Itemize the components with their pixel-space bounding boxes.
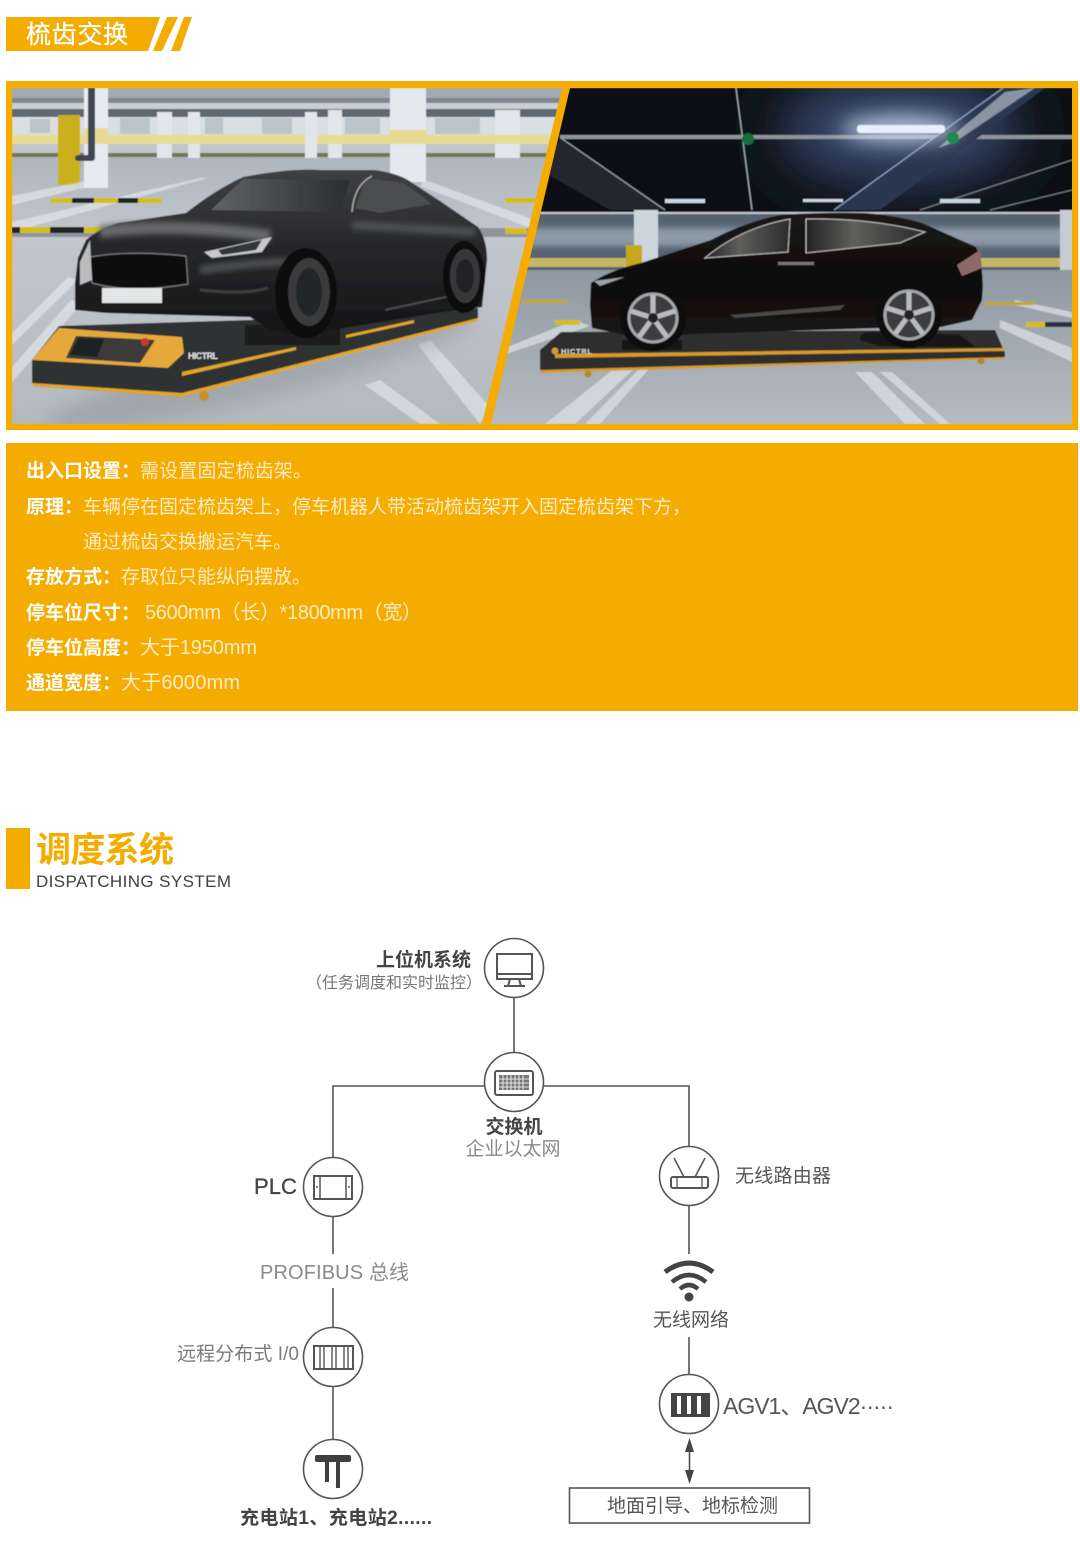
spec: 原理: 原理： (26, 497, 83, 518)
spec: 通道宽度: 通道宽度： (26, 671, 121, 694)
black SUV (590, 213, 983, 351)
heading: 调度系统 DISPATCHING SYSTEM: DISPATCHING SYSTEM (36, 872, 231, 891)
spec: 停车位尺寸: 停车位尺寸： (26, 601, 140, 624)
AGV robot platform (32, 307, 479, 424)
node: 充电站: 充电站1、充电站2...... (240, 1506, 432, 1529)
black coupe (75, 170, 487, 338)
heading banner: 梳齿交换: 梳齿交换 (26, 21, 128, 49)
spec: 出入口设置: 需设置固定梳齿架。 (140, 460, 312, 482)
node: 上位机系统 (306, 938, 544, 998)
box: 地面引导、地标检测 (570, 1488, 810, 1523)
spec: 停车位高度: 大于1950mm (140, 636, 257, 659)
node: PLC (254, 1158, 362, 1216)
spec: 原理: 车辆停在固定梳齿架上，停车机器人带活动梳齿架开入固定梳齿架下方， (83, 496, 691, 518)
icon: wifi 无线网络 (653, 1263, 729, 1331)
node: 上位机系统: 上位机系统 (376, 948, 471, 971)
spec: 出入口设置: 出入口设置： (26, 460, 140, 482)
spec: 原理 (26, 496, 691, 553)
heading banner: 梳齿交换 (6, 17, 192, 51)
node: PLC: PLC (254, 1174, 297, 1199)
spec: 通道宽度: 大于6000mm (121, 671, 240, 694)
connector lines (333, 998, 689, 1439)
node: 无线路由器 (660, 1146, 831, 1206)
spec: 停车位高度 (26, 636, 257, 659)
spec: 存放方式: 存取位只能纵向摆放。 (121, 566, 311, 588)
photo: SUV on comb-exchange robot (480, 75, 1080, 425)
node: 交换机 (465, 1052, 561, 1160)
label: PROFIBUS 总线: PROFIBUS 总线 (260, 1261, 409, 1284)
node: 充电站 (240, 1440, 432, 1529)
spec: 原理: 通过梳齿交换搬运汽车。 (83, 531, 292, 553)
panel: specifications (6, 443, 1078, 711)
spec: 停车位尺寸 (26, 601, 422, 624)
node: 远程分布式 I/0 (177, 1328, 362, 1386)
arrow: two-way AGV to ground guidance (685, 1438, 694, 1484)
AGV robot platform: HICTRL (561, 347, 592, 356)
icon: wifi 无线网络: 无线网络 (653, 1309, 729, 1331)
spec: 停车位高度: 停车位高度： (26, 636, 140, 659)
node: AGV (660, 1374, 894, 1434)
panel: product photos frame (6, 75, 1080, 450)
spec: 出入口设置 (26, 460, 312, 482)
node: 无线路由器: 无线路由器 (735, 1165, 831, 1187)
spec: 存放方式: 存放方式： (26, 565, 121, 588)
node: 上位机系统: （任务调度和实时监控） (306, 974, 482, 992)
node: 交换机: 企业以太网 (465, 1138, 561, 1160)
heading: 调度系统 DISPATCHING SYSTEM (6, 828, 231, 891)
diagram: network topology (177, 938, 894, 1529)
photo: coupe on comb-exchange robot (12, 88, 572, 450)
AGV robot platform (540, 330, 1005, 378)
spec: 存放方式 (26, 565, 311, 588)
spec: 通道宽度 (26, 671, 240, 694)
heading: 调度系统 DISPATCHING SYSTEM: 调度系统 (36, 831, 174, 870)
node: 交换机: 交换机 (485, 1115, 543, 1138)
AGV robot platform: HICTRL (188, 351, 218, 361)
spec: 停车位尺寸: 5600mm（长）*1800mm（宽） (145, 601, 422, 624)
box: 地面引导、地标检测: 地面引导、地标检测 (607, 1495, 778, 1517)
node: 远程分布式 I/0: 远程分布式 I/0 (177, 1343, 299, 1365)
node: AGV: AGV1、AGV2····· (723, 1393, 894, 1419)
